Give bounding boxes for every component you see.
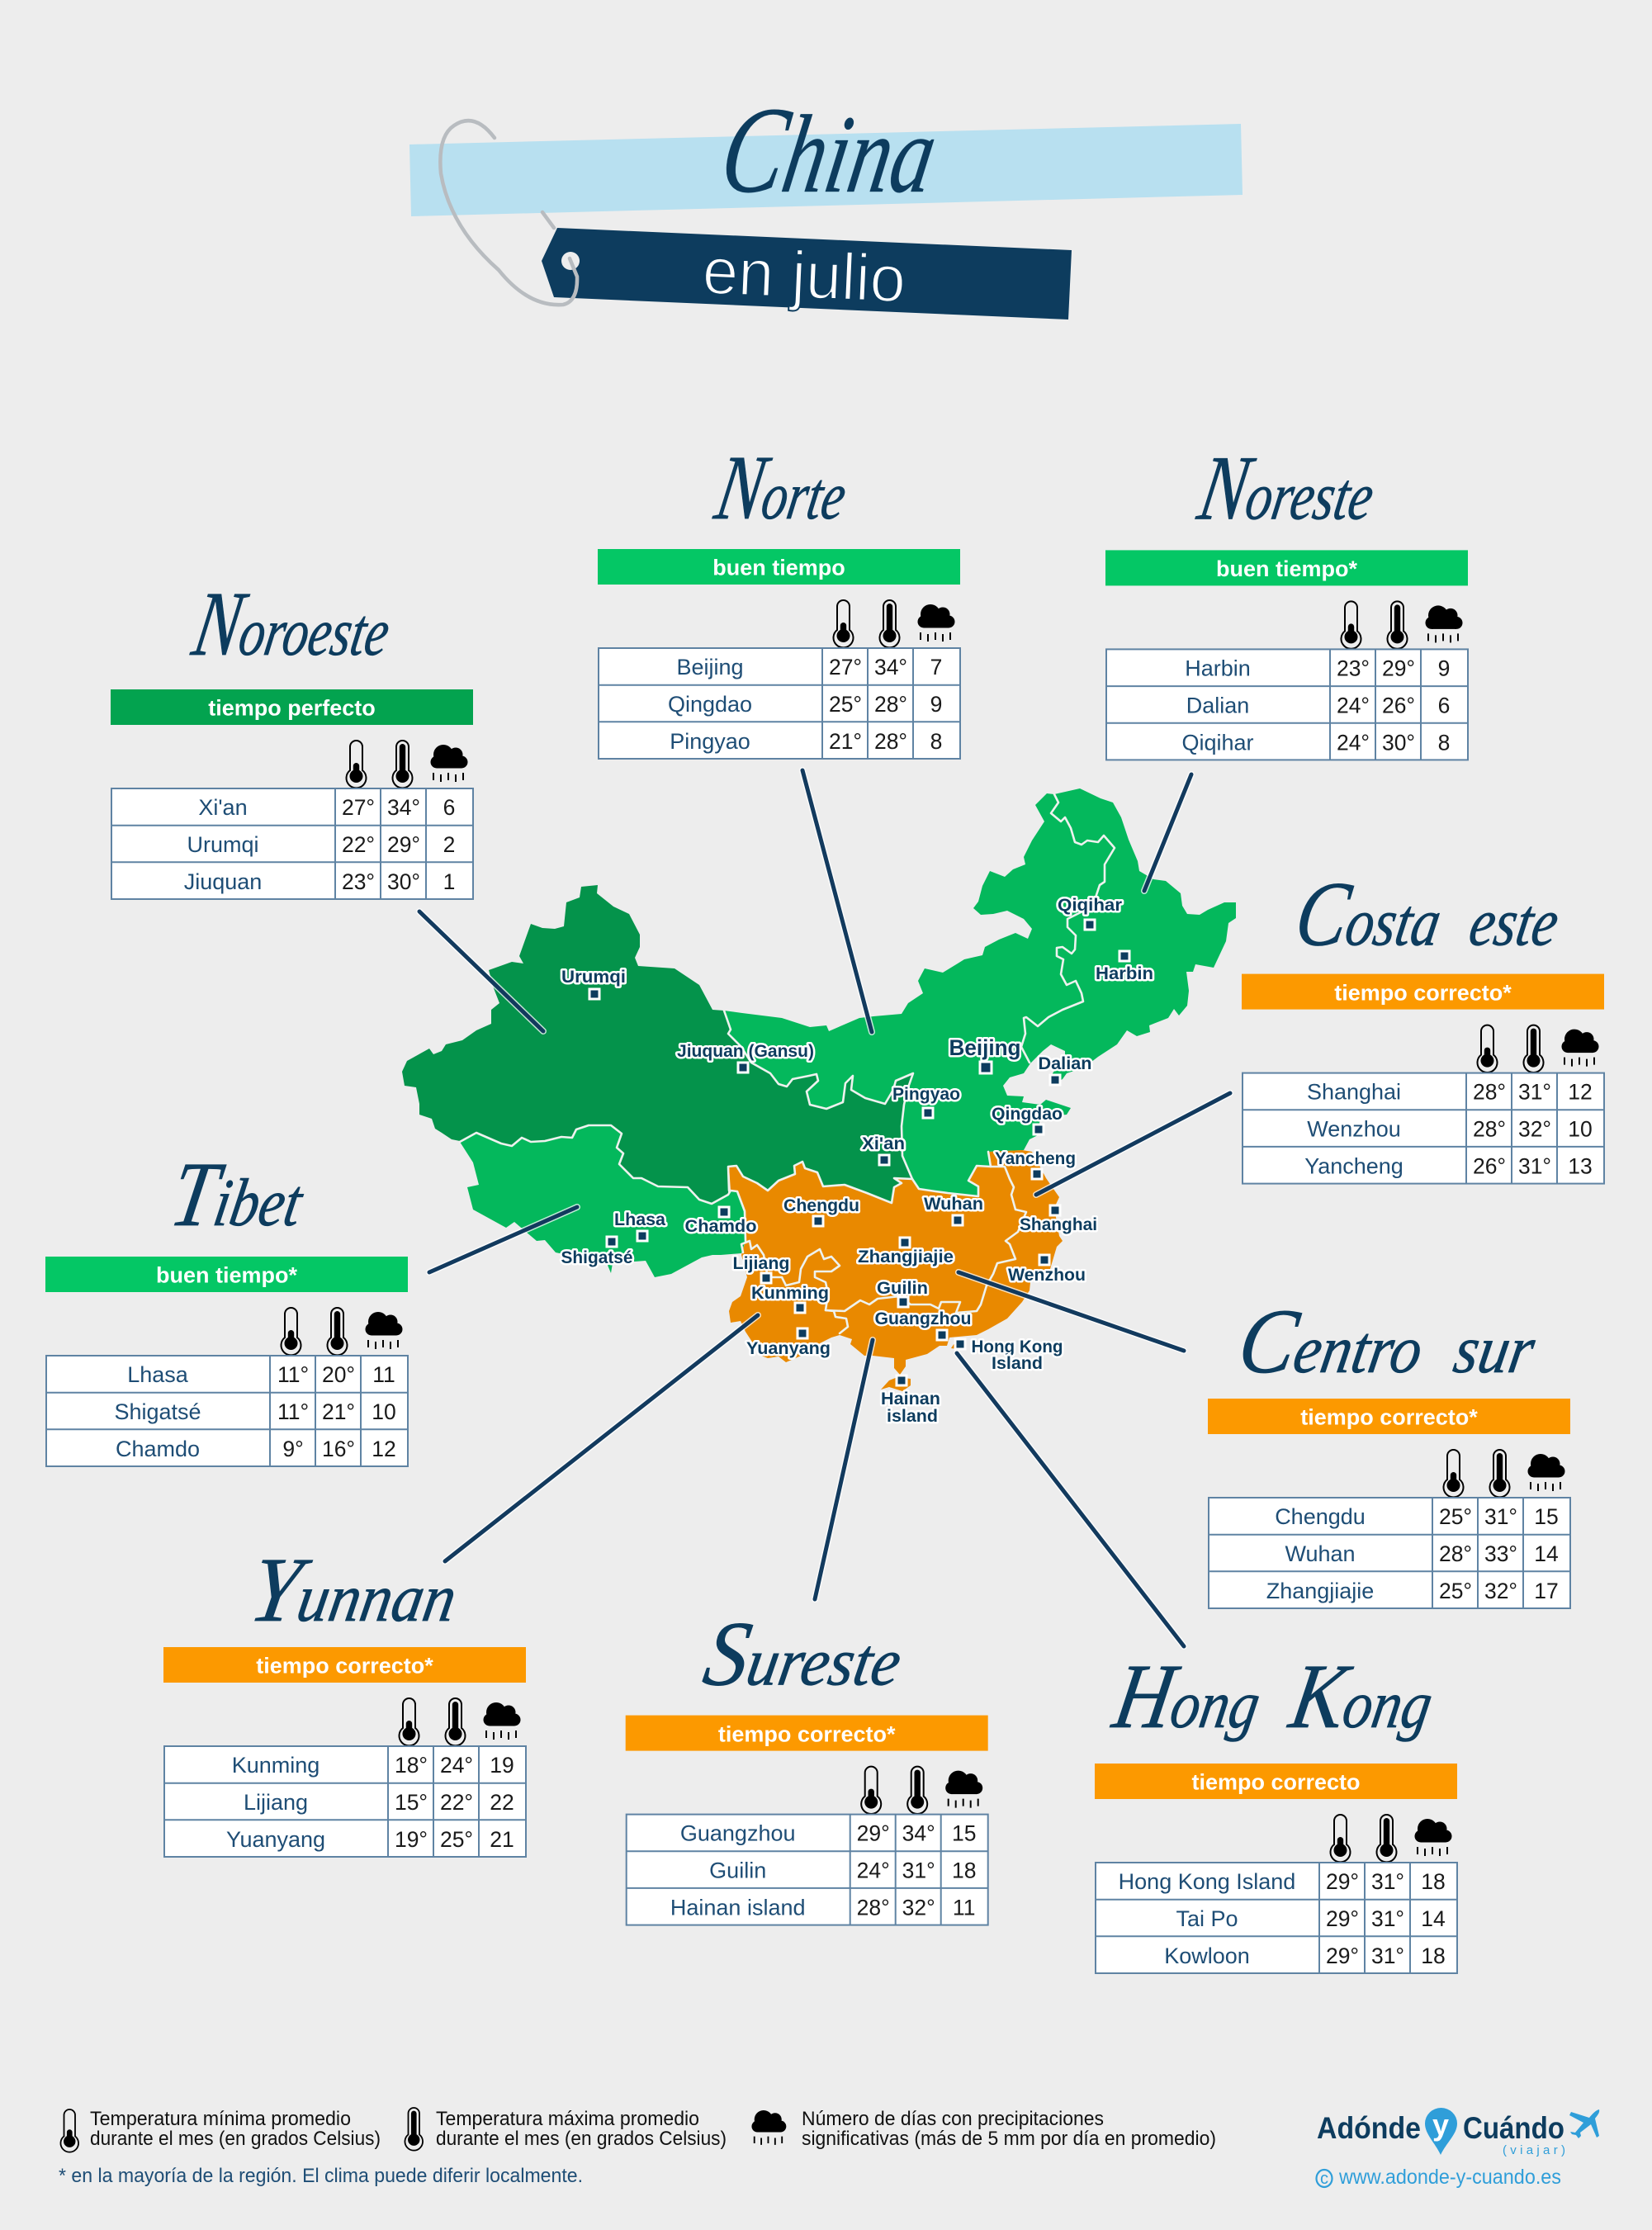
title: China: China (712, 81, 948, 219)
legend text: rain days (802, 2108, 1216, 2150)
city: Hong Kong Island (955, 1338, 1063, 1373)
table: Wenzhou (1307, 1117, 1401, 1142)
icon: rain days (1415, 1819, 1451, 1856)
icon: min temperature (1341, 601, 1361, 649)
city: Urumqi (561, 968, 626, 999)
city: Hong Kong Island: Island (992, 1354, 1043, 1373)
city: Lijiang: Lijiang (733, 1254, 789, 1273)
city: Chamdo: Chamdo (685, 1217, 756, 1236)
table: Zhangjiajie (1266, 1579, 1374, 1603)
icon: max temperature (1387, 601, 1407, 649)
connector: Costa este (1036, 1093, 1230, 1195)
logo pin (1425, 2108, 1457, 2155)
rating bar: tiempo correcto* (1334, 980, 1512, 1005)
table: 33° (1484, 1541, 1517, 1566)
footnote: * en la mayoría de la región. El clima puede diferir localmente. (59, 2165, 583, 2187)
city: Hong Kong Island: Hong Kong (971, 1338, 1063, 1356)
icon: min temperature (1478, 1025, 1498, 1072)
table: 29° (1326, 1869, 1359, 1894)
table: Chamdo (116, 1437, 200, 1461)
logo pin: y (1432, 2108, 1449, 2142)
panel: Yunnan (163, 1539, 526, 1857)
rating bar (1242, 974, 1604, 1010)
table: 23° (342, 869, 375, 894)
table: 6 (1438, 693, 1450, 717)
legend icon: max temperature (405, 2108, 423, 2151)
city: Dalian: Dalian (1039, 1054, 1091, 1073)
table: 30° (1382, 730, 1415, 755)
heading: Noroeste: Noroeste (186, 573, 399, 675)
city: Hainan island (881, 1375, 940, 1426)
city: Yancheng (995, 1149, 1076, 1179)
table: 13 (1568, 1154, 1593, 1179)
table: 28° (1473, 1080, 1506, 1105)
panel: Hong Kong (1095, 1645, 1457, 1973)
legend icon: min temperature (60, 2109, 78, 2152)
heading: Hong Kong: Hong Kong (1105, 1645, 1441, 1748)
table: 25° (829, 692, 862, 717)
table: 16° (322, 1437, 355, 1461)
city: Hainan island: Hainan (881, 1390, 940, 1409)
rating bar: tiempo correcto* (718, 1721, 896, 1746)
city: Chamdo (685, 1207, 756, 1236)
logo word: Cuándo: Cuándo (1463, 2111, 1564, 2145)
rating bar: buen tiempo* (156, 1263, 297, 1288)
table: 34° (902, 1821, 935, 1846)
heading: Centro sur: Centro sur (1232, 1290, 1545, 1393)
table: 25° (1439, 1504, 1472, 1529)
table: 14 (1534, 1541, 1559, 1566)
table: 17 (1534, 1579, 1559, 1603)
city: Shigatsé (561, 1237, 632, 1267)
rating bar (1095, 1764, 1457, 1799)
icon: max temperature (446, 1698, 466, 1745)
luggage tag (542, 228, 1072, 320)
table: Beijing (676, 655, 744, 679)
table: 22° (440, 1790, 473, 1815)
table: 15° (395, 1790, 428, 1815)
icon: max temperature (907, 1767, 927, 1814)
icon: min temperature (281, 1308, 301, 1355)
table: 11° (277, 1399, 309, 1424)
table: 29° (1382, 656, 1415, 680)
table: 34° (387, 795, 420, 820)
table: 31° (1518, 1154, 1551, 1179)
table: Lijiang (244, 1790, 308, 1815)
title banner (409, 81, 1243, 320)
icon: min temperature (861, 1767, 881, 1814)
panel: Centro sur (1208, 1290, 1570, 1608)
Hainan island shape (881, 1343, 958, 1391)
table: 21° (322, 1399, 355, 1424)
icon: min temperature (1443, 1450, 1463, 1497)
table: 29° (1326, 1944, 1359, 1968)
city: Lhasa (614, 1210, 665, 1241)
table: Guangzhou (680, 1821, 796, 1846)
rating bar (598, 549, 960, 585)
table: Yancheng (1304, 1154, 1403, 1179)
table: 8 (1438, 730, 1450, 755)
table: 18 (1421, 1944, 1446, 1968)
table (1106, 649, 1468, 760)
website: www.adonde-y-cuando.es (1338, 2166, 1561, 2189)
table: 31° (1371, 1944, 1404, 1968)
table: 19° (395, 1827, 428, 1852)
icon: min temperature (400, 1698, 419, 1745)
city: Jiuquan (677, 1042, 814, 1072)
city: Qingdao (992, 1105, 1063, 1134)
rating bar: tiempo correcto (1191, 1770, 1361, 1795)
city: Yancheng: Yancheng (995, 1149, 1076, 1168)
city: Zhangjiajie (858, 1238, 954, 1267)
city: Shanghai (1020, 1205, 1097, 1234)
table: Jiuquan (184, 869, 262, 894)
logo tagline: ( v i a j a r ) (1503, 2143, 1565, 2157)
table: 20° (322, 1362, 355, 1387)
table: 8 (930, 729, 942, 754)
city: Pingyao: Pingyao (892, 1085, 960, 1104)
city: Xi'an: Xi'an (862, 1134, 905, 1153)
city: Lijiang (733, 1254, 789, 1283)
rating bar (1105, 550, 1468, 585)
icon: max temperature (1524, 1025, 1544, 1072)
table: 9° (282, 1437, 304, 1461)
table: 29° (857, 1821, 890, 1846)
table: 32° (902, 1896, 935, 1920)
rating bar (163, 1647, 526, 1683)
connector: Yunnan (445, 1315, 758, 1561)
icon: plane (1569, 2109, 1599, 2138)
city: Pingyao (892, 1085, 960, 1118)
connector: Norte (802, 770, 872, 1032)
table: 34° (874, 655, 907, 679)
rating bar: buen tiempo* (1216, 556, 1357, 581)
city: Guangzhou: Guangzhou (875, 1309, 971, 1328)
panel: Noreste (1105, 437, 1468, 760)
table: 1 (443, 869, 455, 894)
table: Yuanyang (226, 1827, 325, 1852)
table: Hong Kong Island (1119, 1869, 1295, 1894)
rating bar (626, 1716, 988, 1751)
table: 32° (1518, 1117, 1551, 1142)
heading: Yunnan: Yunnan (244, 1539, 466, 1641)
region: Tibet (460, 1125, 746, 1277)
legend text: min temperature: Temperatura mínima promedio (90, 2108, 351, 2130)
city: Wenzhou: Wenzhou (1008, 1266, 1086, 1285)
table (1243, 1073, 1604, 1184)
logo word: Adónde: Adónde (1317, 2111, 1421, 2145)
connector lines (419, 770, 1230, 1646)
connector: Hong Kong (957, 1353, 1184, 1646)
table: 21 (490, 1827, 514, 1852)
icon: rain days (1527, 1454, 1565, 1491)
table: 26° (1473, 1154, 1506, 1179)
table (599, 648, 960, 759)
table: 28° (874, 692, 907, 717)
table: 11 (953, 1896, 975, 1920)
icon: min temperature (1331, 1815, 1351, 1862)
heading: Costa este: Costa este (1289, 863, 1568, 965)
rating bar: tiempo correcto* (1300, 1405, 1478, 1430)
region: north and northeast (724, 788, 1236, 1196)
city: Guilin: Guilin (877, 1279, 928, 1298)
heading: Sureste: Sureste (697, 1603, 911, 1705)
table: 22 (490, 1790, 514, 1815)
city: Shigatsé: Shigatsé (561, 1248, 632, 1267)
table: 18 (952, 1858, 976, 1883)
table: 15 (952, 1821, 976, 1846)
city: Wuhan (924, 1195, 983, 1225)
city: Harbin: Harbin (1096, 964, 1153, 983)
city: Chengdu (783, 1196, 859, 1226)
city: Wenzhou (1008, 1255, 1086, 1285)
connector: Noreste (1144, 774, 1191, 891)
table: 25° (440, 1827, 473, 1852)
table (627, 1815, 988, 1925)
heading: Tibet: Tibet (164, 1143, 313, 1246)
table: 9 (930, 692, 942, 717)
panel: Tibet (45, 1143, 408, 1466)
table (1209, 1498, 1570, 1608)
legend text: rain days: significativas (más de 5 mm por día en promedio) (802, 2128, 1216, 2150)
table: 2 (443, 832, 455, 857)
table: 18 (1421, 1869, 1446, 1894)
table: 12 (372, 1437, 396, 1461)
table: 31° (1518, 1080, 1551, 1105)
table: 15 (1534, 1504, 1559, 1529)
table (46, 1356, 408, 1466)
table: Qingdao (668, 692, 752, 717)
icon: max temperature (880, 600, 900, 647)
table: 9 (1438, 656, 1450, 680)
region: northwest (402, 885, 913, 1204)
icon: rain days (945, 1771, 982, 1808)
table: 19 (490, 1753, 514, 1778)
table: 11 (372, 1362, 395, 1387)
table: 12 (1568, 1080, 1593, 1105)
table: 22° (342, 832, 375, 857)
copyright mark: c (1320, 2170, 1328, 2188)
panel: Norte (598, 437, 960, 759)
table: 27° (829, 655, 862, 679)
icon: min temperature (834, 600, 854, 647)
city: Yuanyang (746, 1328, 831, 1358)
table: 27° (342, 795, 375, 820)
icon: rain days (918, 604, 954, 642)
table: 18° (395, 1753, 428, 1778)
city: Jiuquan: Jiuquan (Gansu) (677, 1042, 814, 1061)
city: Shanghai: Shanghai (1020, 1215, 1097, 1234)
table: 28° (1473, 1117, 1506, 1142)
table: 25° (1439, 1579, 1472, 1603)
legend text: max temperature: durante el mes (en grados Celsius) (436, 2128, 727, 2150)
icon: rain days (1562, 1030, 1598, 1067)
logo (1316, 2108, 1599, 2189)
legend (59, 2108, 1216, 2187)
connector: Sureste (815, 1340, 873, 1599)
icon: min temperature (347, 741, 367, 788)
table: Guilin (709, 1858, 766, 1883)
city: Lhasa: Lhasa (614, 1210, 665, 1229)
table: Kowloon (1164, 1944, 1250, 1968)
city: Guilin (877, 1279, 928, 1307)
legend text: rain days: Número de días con precipitaciones (802, 2108, 1104, 2130)
rating bar: tiempo perfecto (208, 696, 376, 721)
table: 31° (1371, 1869, 1404, 1894)
rating bar (1208, 1399, 1570, 1434)
subtitle: en julio: en julio (701, 234, 907, 316)
light blue title strip (409, 124, 1243, 216)
legend text: max temperature: Temperatura máxima promedio (436, 2108, 699, 2130)
table: Qiqihar (1181, 730, 1254, 755)
table: Hainan island (670, 1896, 806, 1920)
table: 6 (443, 795, 455, 820)
map city labels (561, 896, 1153, 1426)
table: Wuhan (1285, 1541, 1356, 1566)
city: Beijing: Beijing (949, 1035, 1020, 1060)
connector: Noroeste (419, 911, 543, 1031)
icon: max temperature (393, 741, 413, 788)
city: Xi'an (862, 1134, 905, 1165)
city: Kunming: Kunming (751, 1284, 829, 1303)
city: Harbin (1096, 951, 1153, 983)
tag hole (561, 252, 580, 270)
rating bar (45, 1257, 408, 1292)
panel: Noroeste (111, 573, 473, 899)
table: 24° (1337, 693, 1370, 717)
icon: rain days (484, 1702, 520, 1740)
table: 29° (387, 832, 420, 857)
panel: Costa este (1242, 863, 1604, 1184)
table: 32° (1484, 1579, 1517, 1603)
city: Zhangjiajie: Zhangjiajie (858, 1248, 954, 1267)
map of China (402, 788, 1236, 1391)
panel: Sureste (626, 1603, 988, 1925)
table: 28° (857, 1896, 890, 1920)
tag string (440, 121, 577, 305)
table: Tai Po (1176, 1906, 1238, 1931)
table: Urumqi (187, 832, 259, 857)
copyright mark (1316, 2170, 1332, 2188)
table: 31° (902, 1858, 935, 1883)
icon: max temperature (1377, 1815, 1397, 1862)
connector: Tibet (429, 1207, 577, 1272)
legend text: min temperature (90, 2108, 381, 2150)
icon: rain days (431, 745, 467, 782)
table: Xi'an (198, 795, 248, 820)
city: Hainan island: island (887, 1407, 938, 1426)
table: 26° (1382, 693, 1415, 717)
table: Dalian (1186, 693, 1249, 717)
region: south and east (729, 1150, 1063, 1375)
table (111, 788, 473, 899)
table: 30° (387, 869, 420, 894)
city: Kunming (751, 1284, 829, 1313)
table: Pingyao (670, 729, 750, 754)
city: Qiqihar (1058, 896, 1122, 930)
table: 10 (372, 1399, 396, 1424)
legend icon: rain days (751, 2110, 786, 2145)
city: Dalian (1039, 1054, 1091, 1085)
rating bar: buen tiempo (712, 556, 845, 580)
city: Qingdao: Qingdao (992, 1105, 1063, 1124)
table: 31° (1371, 1906, 1404, 1931)
table: 21° (829, 729, 862, 754)
table: 7 (930, 655, 942, 679)
table (164, 1746, 526, 1857)
icon: max temperature (327, 1308, 347, 1355)
city: Chengdu: Chengdu (783, 1196, 859, 1215)
city: Beijing (949, 1035, 1020, 1073)
legend text: max temperature (436, 2108, 727, 2150)
table: 24° (440, 1753, 473, 1778)
table: Lhasa (127, 1362, 189, 1387)
table: 10 (1568, 1117, 1593, 1142)
city: Yuanyang: Yuanyang (746, 1339, 831, 1358)
table: Kunming (232, 1753, 320, 1778)
table: Harbin (1185, 656, 1251, 680)
city: Wuhan: Wuhan (924, 1195, 983, 1214)
table: 28° (1439, 1541, 1472, 1566)
table: 29° (1326, 1906, 1359, 1931)
table: 23° (1337, 656, 1370, 680)
table (1096, 1863, 1457, 1973)
legend text: min temperature: durante el mes (en grados Celsius) (90, 2128, 381, 2150)
rating bar (111, 689, 473, 725)
connector: Centro sur (959, 1272, 1184, 1351)
city: Urumqi: Urumqi (561, 968, 626, 987)
city: Qiqihar: Qiqihar (1058, 896, 1122, 915)
icon: rain days (1425, 605, 1463, 642)
table: 24° (857, 1858, 890, 1883)
rating bar: tiempo correcto* (256, 1654, 433, 1678)
table: 28° (874, 729, 907, 754)
table: Chengdu (1275, 1504, 1366, 1529)
heading: Norte: Norte (708, 437, 855, 539)
heading: Noreste: Noreste (1191, 437, 1383, 539)
table: Shigatsé (114, 1399, 201, 1424)
table: 14 (1421, 1906, 1446, 1931)
table: 11° (277, 1362, 309, 1387)
table: Shanghai (1307, 1080, 1401, 1105)
icon: max temperature (1489, 1450, 1509, 1497)
table: 31° (1484, 1504, 1517, 1529)
city: Guangzhou (875, 1309, 971, 1340)
icon: rain days (365, 1312, 403, 1349)
table: 24° (1337, 730, 1370, 755)
